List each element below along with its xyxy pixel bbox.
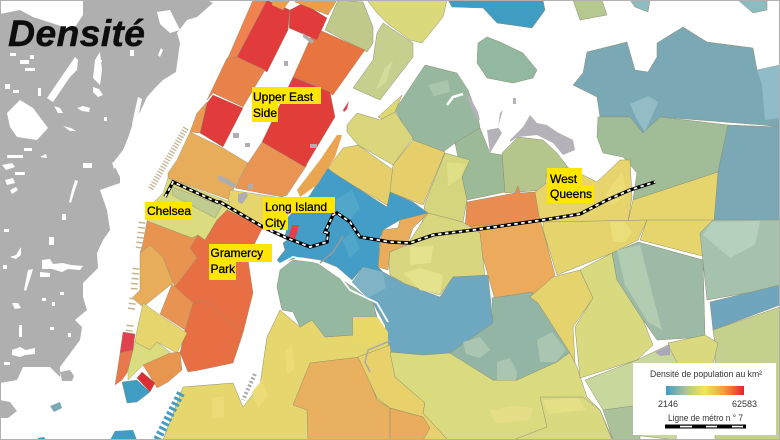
region: red Long Island City block: [288, 225, 299, 240]
region: south-east yellow-green: [713, 307, 780, 440]
title: Densité: [8, 12, 145, 54]
colour scale: [666, 386, 744, 395]
region: yellow Long Island City north: [328, 145, 400, 205]
region: orange top west: [272, 0, 290, 10]
region: light orange Midtown West: [168, 132, 248, 200]
region: orange Sunnyside strip: [378, 213, 428, 270]
region: blue Long Island City: [277, 168, 428, 280]
scale maximum: 62583: [732, 399, 757, 409]
region: light stripe: [617, 245, 662, 330]
region: yellow-green Forest Hills: [575, 253, 653, 378]
region: red Upper West south: [200, 95, 243, 147]
region: green Astoria park: [395, 65, 480, 152]
region: yellow small block: [668, 335, 718, 368]
label: Long Island City: Long Island: [265, 200, 327, 214]
region: yellow Corona south: [543, 220, 647, 275]
New Jersey land mass in gray: [0, 0, 213, 418]
blue Brooklyn piers: [157, 393, 181, 440]
label: Long Island City: City: [265, 216, 286, 230]
gray creek branch: [320, 236, 343, 263]
region: teal Glendale: [450, 292, 570, 380]
region: yellow east of the terminus: [628, 172, 718, 222]
region: yellow Flushing south: [640, 220, 713, 258]
region: orange top centre: [295, 0, 337, 15]
scale minimum: 2146: [658, 399, 678, 409]
region: yellow-green Astoria: [347, 112, 413, 165]
panel: Queens and Brooklyn south districts: [163, 168, 780, 440]
label: West Queens: [547, 168, 594, 203]
region: orange West Village: [140, 221, 198, 287]
region: green island at top: [573, 0, 607, 20]
region: green East Harlem side: [325, 0, 373, 52]
region: red Upper East Side: [262, 77, 335, 167]
metro legend text: Ligne de métro n ° 7: [668, 413, 743, 423]
region: Chelsea yellow-green: [147, 178, 230, 240]
region: orange upper East top: [293, 28, 365, 95]
region: blue Bronx at top: [448, 0, 545, 28]
region: Rikers island: [477, 37, 537, 83]
region: light green south-east: [585, 345, 680, 440]
gray shoreline north Queens: [487, 98, 575, 155]
region: Brooklyn yellow main: [163, 310, 448, 440]
region: orange Battery Park: [115, 350, 133, 385]
label: Gramercy Park: [209, 244, 272, 280]
region: orange Corona: [465, 186, 540, 228]
region: yellow Rego Park: [530, 270, 593, 363]
region: Greenpoint green: [277, 260, 377, 337]
legend: [633, 363, 776, 435]
Newtown Creek: [280, 257, 388, 322]
label: West Queens: Queens: [550, 187, 592, 201]
region: yellow central Brooklyn: [358, 345, 448, 440]
lower Manhattan piers: [129, 222, 142, 332]
region: yellow-green Maspeth: [388, 213, 485, 295]
label: Upper East Side: Upper East: [253, 90, 314, 104]
region: blue southern tip: [122, 380, 150, 403]
legend heading: Densité de population au km²: [650, 369, 762, 379]
water inlet: [447, 94, 463, 105]
region: light teal eastern strip: [757, 65, 780, 120]
label: Gramercy Park: Gramercy: [210, 246, 263, 260]
region: light teal patch: [352, 267, 386, 298]
region: red Battery Park north: [120, 332, 135, 353]
region: yellow-green Ridgewood: [390, 352, 613, 440]
region: green north-east Flushing: [597, 117, 728, 200]
region: light teal patch: [630, 96, 658, 132]
Brooklyn navy piers: [243, 374, 255, 400]
region: green College Point: [502, 137, 570, 193]
label: Chelsea: Chelsea: [147, 204, 191, 218]
region: yellow Tribeca: [135, 303, 187, 353]
region: Lower East orange-red: [180, 300, 243, 372]
region: Chelsea darker band: [172, 187, 222, 218]
region: small islands at top: [630, 0, 767, 13]
region: teal bottom: [603, 405, 640, 440]
region: light patch: [703, 221, 760, 258]
gray and tan pier stripes: [150, 128, 186, 190]
region: Gramercy orange-red: [173, 210, 263, 333]
metro line key: [665, 424, 746, 428]
region: orange Flatbush: [293, 357, 390, 440]
region: yellow-green Woodside: [422, 153, 470, 224]
region: orange Chinatown: [143, 352, 182, 388]
region: yellow-green north shore: [367, 0, 447, 43]
region: small red islet: [343, 101, 349, 112]
region: teal north-east Queens: [573, 27, 780, 133]
label: Long Island City: [263, 197, 335, 230]
region: small yellow: [378, 95, 402, 122]
Central Park buildings, islands and piers: [38, 33, 575, 440]
region: teal central north Queens: [455, 128, 505, 200]
region: red top: [289, 3, 327, 40]
region: orange SoHo: [160, 284, 193, 330]
lighter density patches: [212, 60, 632, 423]
region: lower yellow-green: [513, 397, 612, 440]
region: red Upper West north: [237, 0, 290, 72]
panel: Queens north districts: [325, 0, 780, 300]
panel: Manhattan districts: [115, 0, 365, 403]
gray Central Park and Midtown buildings: [218, 33, 317, 204]
region: teal far east Queens: [712, 125, 780, 222]
region: orange strip west: [190, 102, 207, 133]
region: West Queens yellow: [535, 160, 632, 222]
region: east green block: [700, 220, 780, 300]
region: light orange Greenwich: [132, 245, 173, 307]
label: Gramercy Park: Park: [210, 262, 236, 276]
region: orange Midtown East: [235, 142, 307, 197]
region: yellow Jackson Heights side: [390, 140, 445, 205]
region: blue Bushwick: [352, 267, 493, 355]
region: teal Kew Gardens: [612, 242, 705, 340]
region: green Randalls island: [353, 23, 413, 100]
region: yellow-green Financial: [128, 342, 170, 380]
region: orange Elmhurst: [465, 220, 555, 300]
label: West Queens: West: [550, 172, 578, 186]
region: yellow Midtown south: [227, 190, 282, 227]
teal speck in harbour: [50, 402, 62, 412]
region: orange Upper West: [207, 57, 265, 107]
region: orange south of Brooklyn: [390, 408, 430, 440]
blue land at bottom edge: [38, 430, 137, 440]
region: orange west strip north: [227, 0, 267, 60]
region: Roosevelt Island: [297, 135, 342, 197]
label: Upper East Side: [252, 87, 321, 122]
region: blue strip: [710, 285, 780, 330]
region: gray cemetery: [655, 345, 670, 356]
region: yellow patch beside creek: [353, 317, 388, 342]
label: Upper East Side: Side: [253, 106, 277, 120]
metro line 7: [165, 182, 655, 247]
region: red Wall Street: [137, 372, 155, 392]
gray canal: [365, 341, 390, 372]
